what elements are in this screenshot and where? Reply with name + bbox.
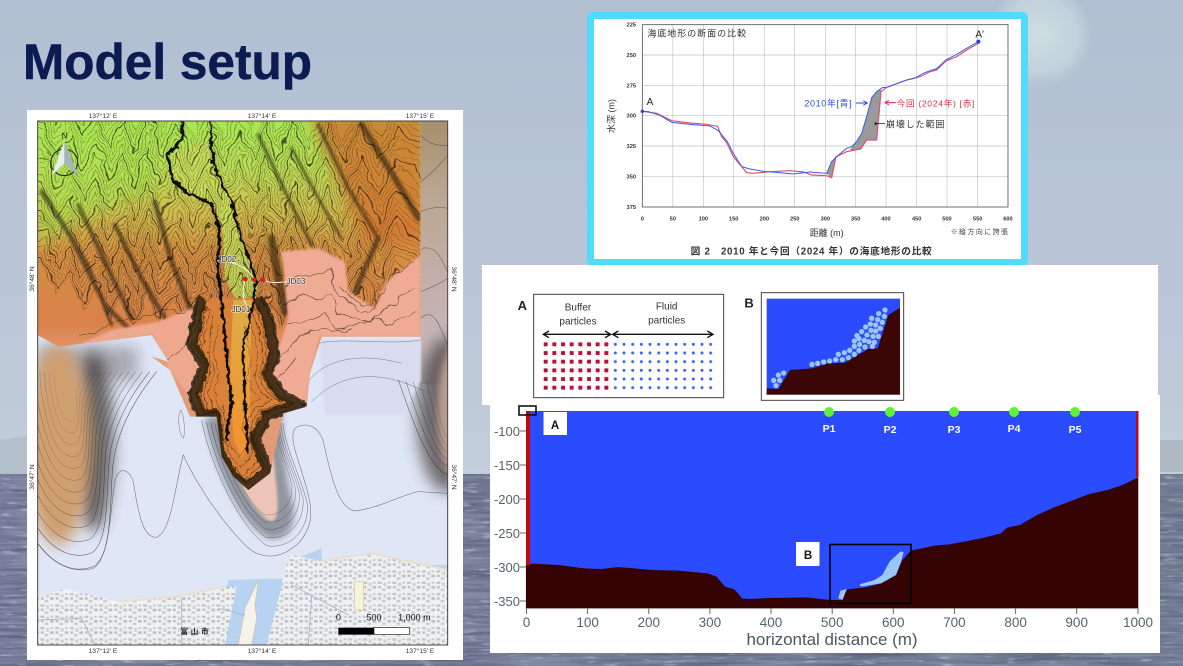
y axis ticks <box>627 23 636 211</box>
panel: seabed cross-section comparison <box>590 16 1024 262</box>
map artwork <box>37 120 448 646</box>
orange north-east tint <box>308 112 428 245</box>
gauge P1 <box>823 407 836 435</box>
zoom box A locator <box>519 406 536 415</box>
x axis ticks: 600 <box>1003 216 1013 222</box>
north arrow <box>51 131 78 176</box>
x axis ticks: 550 <box>973 216 982 222</box>
plot frame <box>642 25 1008 207</box>
exaggeration note: ※縦方向に誇張 <box>951 227 1008 236</box>
scale bar <box>336 613 431 635</box>
sea floor base <box>38 121 448 645</box>
central canyon body <box>193 300 302 490</box>
y axis: -150 <box>494 458 520 473</box>
pale tongue <box>172 138 258 312</box>
nested contours left <box>38 372 157 570</box>
x axis: 600 <box>882 615 905 630</box>
sampling sites JD01 JD02 JD03: JD01 <box>232 305 251 314</box>
map graticule labels: 137°14' E <box>248 647 277 655</box>
map graticule labels <box>28 112 458 655</box>
x axis ticks: 100 <box>699 216 708 222</box>
left lobe shading <box>25 345 138 545</box>
y axis ticks: 325 <box>627 144 636 150</box>
cross-section chart <box>605 23 1013 257</box>
x axis: 500 <box>821 615 843 630</box>
x axis: 100 <box>576 615 599 630</box>
contours in right column <box>421 135 448 345</box>
tag A: A <box>551 420 559 432</box>
map graticule labels: 137°12' E <box>89 647 118 655</box>
place name: 富山市 <box>180 626 209 636</box>
canyon dark rim <box>190 298 307 492</box>
x axis ticks: 200 <box>760 216 769 222</box>
gauge P3: P3 <box>948 424 961 436</box>
point labels: A <box>647 97 654 108</box>
tag B <box>796 542 820 566</box>
green north-west tint <box>38 158 155 249</box>
seabed and slide deposit <box>526 477 1138 608</box>
gauge P4 <box>1008 407 1021 435</box>
sampling sites JD01 JD02 JD03: JD03 <box>287 277 306 286</box>
right lobe shading <box>406 122 448 501</box>
x axis title: horizontal distance (m) <box>746 630 918 649</box>
y axis: -350 <box>494 594 520 609</box>
gauge P1: P1 <box>823 423 836 435</box>
y axis ticks: 300 <box>627 114 636 120</box>
centre lobe shading <box>205 405 294 539</box>
x axis ticks <box>641 216 1013 222</box>
river and harbour water <box>220 548 448 645</box>
scale bar: 500 <box>366 613 381 623</box>
white backing upper <box>482 265 1158 405</box>
x axis ticks: 50 <box>670 216 676 222</box>
map graticule labels: 137°12' E <box>89 112 118 120</box>
contours in lavender patch <box>298 340 425 402</box>
gauge P2: P2 <box>884 424 897 436</box>
buffer walls <box>526 411 530 565</box>
cyan frame <box>590 16 1024 262</box>
x axis: 900 <box>1065 615 1088 630</box>
map frame <box>38 121 448 645</box>
y axis <box>494 424 526 609</box>
y axis title: 水深 (m) <box>605 99 616 133</box>
gauge P2 <box>884 407 897 436</box>
map graticule labels: 36°47' N <box>450 464 458 490</box>
simulation chart <box>494 406 1153 649</box>
x axis title: 距離 (m) <box>810 227 844 238</box>
x axis: 0 <box>523 615 530 630</box>
label collapsed range: 崩壊した範囲 <box>886 119 944 130</box>
map card <box>27 110 463 660</box>
water column <box>526 411 1138 608</box>
endpoints <box>641 40 980 113</box>
caption: 図 2 2010 年と今回（2024 年）の海底地形の比較 <box>691 245 932 257</box>
x axis: 700 <box>943 615 966 630</box>
elevation tint <box>38 121 421 491</box>
gauge P3 <box>948 407 961 436</box>
map graticule labels: 36°48' N <box>28 266 36 292</box>
outer thin contour <box>38 425 448 570</box>
x axis ticks: 350 <box>851 216 860 222</box>
inset B <box>744 293 904 400</box>
sand shore <box>118 553 448 602</box>
y axis ticks: 250 <box>627 53 636 59</box>
x axis: 400 <box>760 615 782 630</box>
inset B: B <box>744 296 754 311</box>
y axis: -250 <box>494 526 520 541</box>
sampling sites JD01 JD02 JD03: JD02 <box>218 255 237 264</box>
x axis ticks: 250 <box>790 216 799 222</box>
map graticule labels: 36°47' N <box>28 464 36 490</box>
y axis ticks: 350 <box>627 174 636 180</box>
dark ravines <box>42 125 418 328</box>
inset A: particles <box>648 316 685 327</box>
label 2010 blue: 2010年[青] <box>804 98 852 109</box>
collapsed area fill <box>827 90 881 178</box>
nested contours centre <box>202 420 307 546</box>
map graticule labels: 36°48' N <box>450 266 458 292</box>
white backing lower <box>490 395 1160 653</box>
inset A: A <box>518 298 528 313</box>
grid <box>642 25 1008 207</box>
x axis: 1000 <box>1123 615 1153 630</box>
x axis ticks: 450 <box>912 216 921 222</box>
zoom box B locator <box>830 544 911 604</box>
north arrow: N <box>62 131 68 140</box>
scale bar: 1,000 m <box>398 613 431 623</box>
nested contours right <box>398 380 448 475</box>
y axis ticks: 225 <box>627 23 636 29</box>
inset A: particles <box>559 316 597 327</box>
inset A <box>518 294 724 398</box>
gauge P4: P4 <box>1008 423 1021 435</box>
plain contours <box>85 268 421 385</box>
terrain relief <box>38 122 421 490</box>
2024 red profile <box>642 43 978 178</box>
x axis ticks: 0 <box>641 216 644 222</box>
x axis ticks: 400 <box>881 216 891 222</box>
y axis ticks: 275 <box>627 83 636 89</box>
2010 blue profile <box>642 42 978 174</box>
y axis ticks: 375 <box>627 205 636 211</box>
cross-section chart: A′ <box>975 29 984 40</box>
inset A: Fluid <box>656 302 677 313</box>
small closed contour <box>179 410 184 438</box>
panel: SPH model <box>482 265 1160 653</box>
tag B: B <box>804 550 812 562</box>
chart title: 海底地形の断面の比較 <box>647 28 746 39</box>
label 2010 blue <box>804 98 867 109</box>
east land <box>267 553 448 645</box>
canyon axis <box>230 300 252 458</box>
x axis: 200 <box>638 615 660 630</box>
roads <box>38 585 348 645</box>
y axis: -200 <box>494 492 520 507</box>
gauge P5 <box>1069 407 1082 436</box>
sampling sites JD01 JD02 JD03 <box>218 255 306 314</box>
west land <box>38 587 237 645</box>
map graticule labels: 137°14' E <box>248 112 277 120</box>
salmon strip west <box>80 307 200 396</box>
x axis ticks: 150 <box>729 216 738 222</box>
lavender patch <box>320 340 421 415</box>
finger contours <box>38 122 421 337</box>
map graticule labels: 137°15' E <box>406 647 435 655</box>
gauge P5: P5 <box>1069 424 1082 436</box>
x axis ticks: 500 <box>942 216 952 222</box>
y axis: -100 <box>494 424 520 439</box>
main canyon channels <box>170 122 258 455</box>
title: Model setup <box>23 34 312 90</box>
scale bar: 0 <box>336 613 341 623</box>
park <box>354 582 364 610</box>
inset A and inset B <box>518 293 904 400</box>
label 2024 red: 今回 (2024年) [赤] <box>897 98 974 109</box>
y axis: -300 <box>494 560 520 575</box>
map graticule labels: 137°15' E <box>406 112 435 120</box>
x axis: 800 <box>1004 615 1027 630</box>
panel: bathymetric map <box>27 110 463 660</box>
x axis: 300 <box>699 615 721 630</box>
river island <box>238 580 258 645</box>
tag A <box>544 412 567 435</box>
x axis ticks: 300 <box>821 216 830 222</box>
inset A: Buffer <box>565 302 592 313</box>
coastal city map <box>38 548 448 645</box>
salmon plain east <box>270 248 421 413</box>
x axis <box>523 608 1153 630</box>
